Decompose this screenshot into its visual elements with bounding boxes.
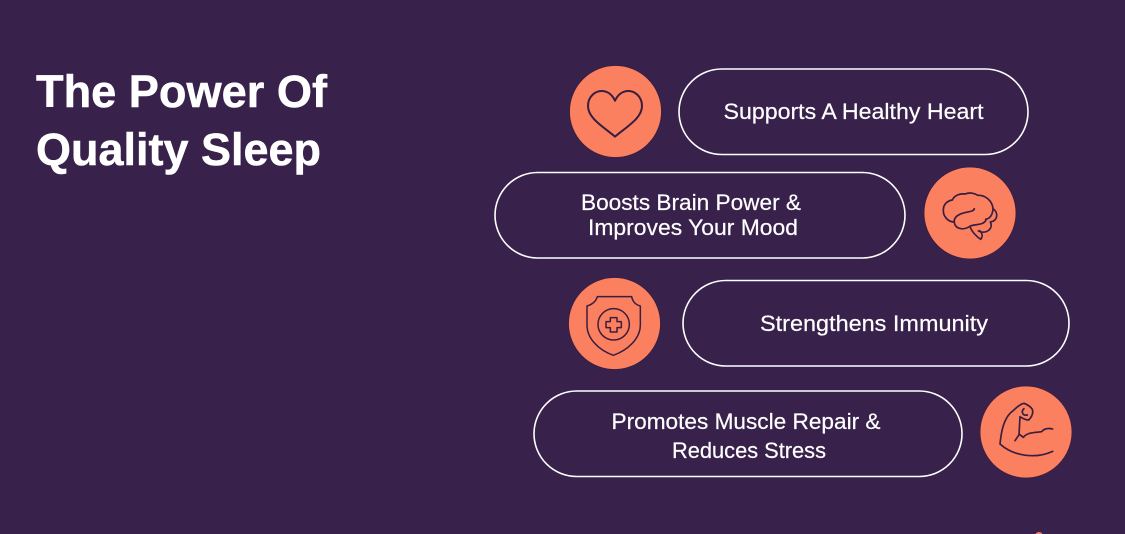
- pill: promotes muscle repair: [534, 391, 962, 476]
- icon: flexed arm: [980, 386, 1072, 478]
- title: Quality Sleep: [36, 124, 321, 175]
- pill: promotes muscle repair: Reduces Stress: [672, 438, 826, 463]
- pill: boosts brain power: [495, 172, 905, 258]
- pill: strengthens immunity: Strengthens Immunity: [760, 311, 988, 336]
- icon: heart: [570, 66, 662, 158]
- benefit: strengthens immunity: [568, 278, 1069, 370]
- title: [36, 66, 328, 175]
- pill: supports a healthy heart: [679, 69, 1028, 154]
- pill: boosts brain power: Improves Your Mood: [588, 215, 798, 240]
- benefit: healthy heart: [570, 66, 1028, 158]
- icon: shield: [568, 278, 660, 370]
- title: The Power Of: [36, 66, 328, 117]
- pill: supports a healthy heart: Supports A Healthy Heart: [724, 99, 984, 124]
- pill: boosts brain power: Boosts Brain Power &: [581, 190, 801, 215]
- benefit: muscle repair and stress: [534, 386, 1072, 478]
- benefit: brain power and mood: [495, 167, 1016, 259]
- pill: strengthens immunity: [683, 280, 1069, 366]
- decorative dot at bottom edge: [1035, 532, 1043, 534]
- pill: promotes muscle repair: Promotes Muscle Repair &: [612, 409, 881, 434]
- icon: brain: [924, 167, 1016, 259]
